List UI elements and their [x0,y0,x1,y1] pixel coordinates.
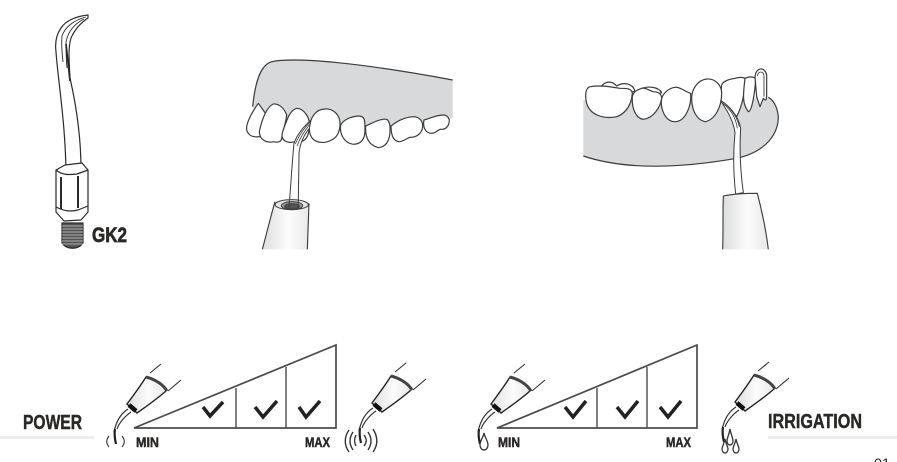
tip in upper teeth [289,120,311,203]
label: irrigation MIN: MIN [498,435,520,450]
tip shaft [56,15,88,170]
icon: handpiece at minimum irrigation [478,364,545,450]
tip in lower teeth [721,101,743,194]
icon: handpiece at maximum irrigation [722,362,789,453]
icon: handpiece at minimum power [107,364,181,447]
upper gum [253,60,453,130]
icon: handpiece at maximum power [345,363,426,452]
upper teeth [247,103,449,148]
handpiece [723,193,768,249]
label: power MIN: MIN [136,435,159,450]
rule: power [0,436,94,439]
rule: irrigation [768,436,897,439]
icon: GK2 scaler tip [56,15,88,248]
heading: POWER: POWER [23,412,82,434]
lower gum [583,97,778,166]
label: irrigation MAX: MAX [666,435,691,450]
label: power MAX: MAX [305,435,330,450]
chart: irrigation triangle [497,345,697,428]
heading: IRRIGATION: IRRIGATION [768,411,862,433]
check marks: irrigation [565,401,681,417]
lower teeth [586,69,767,122]
chart: power triangle [134,345,336,428]
threaded base [62,223,83,248]
check marks: power [203,401,320,417]
handpiece [262,199,309,249]
illustration: lower teeth with tip [583,69,778,249]
illustration: upper teeth with tip [247,60,453,249]
hex nut [56,163,88,221]
label: GK2: GK2 [92,224,127,247]
